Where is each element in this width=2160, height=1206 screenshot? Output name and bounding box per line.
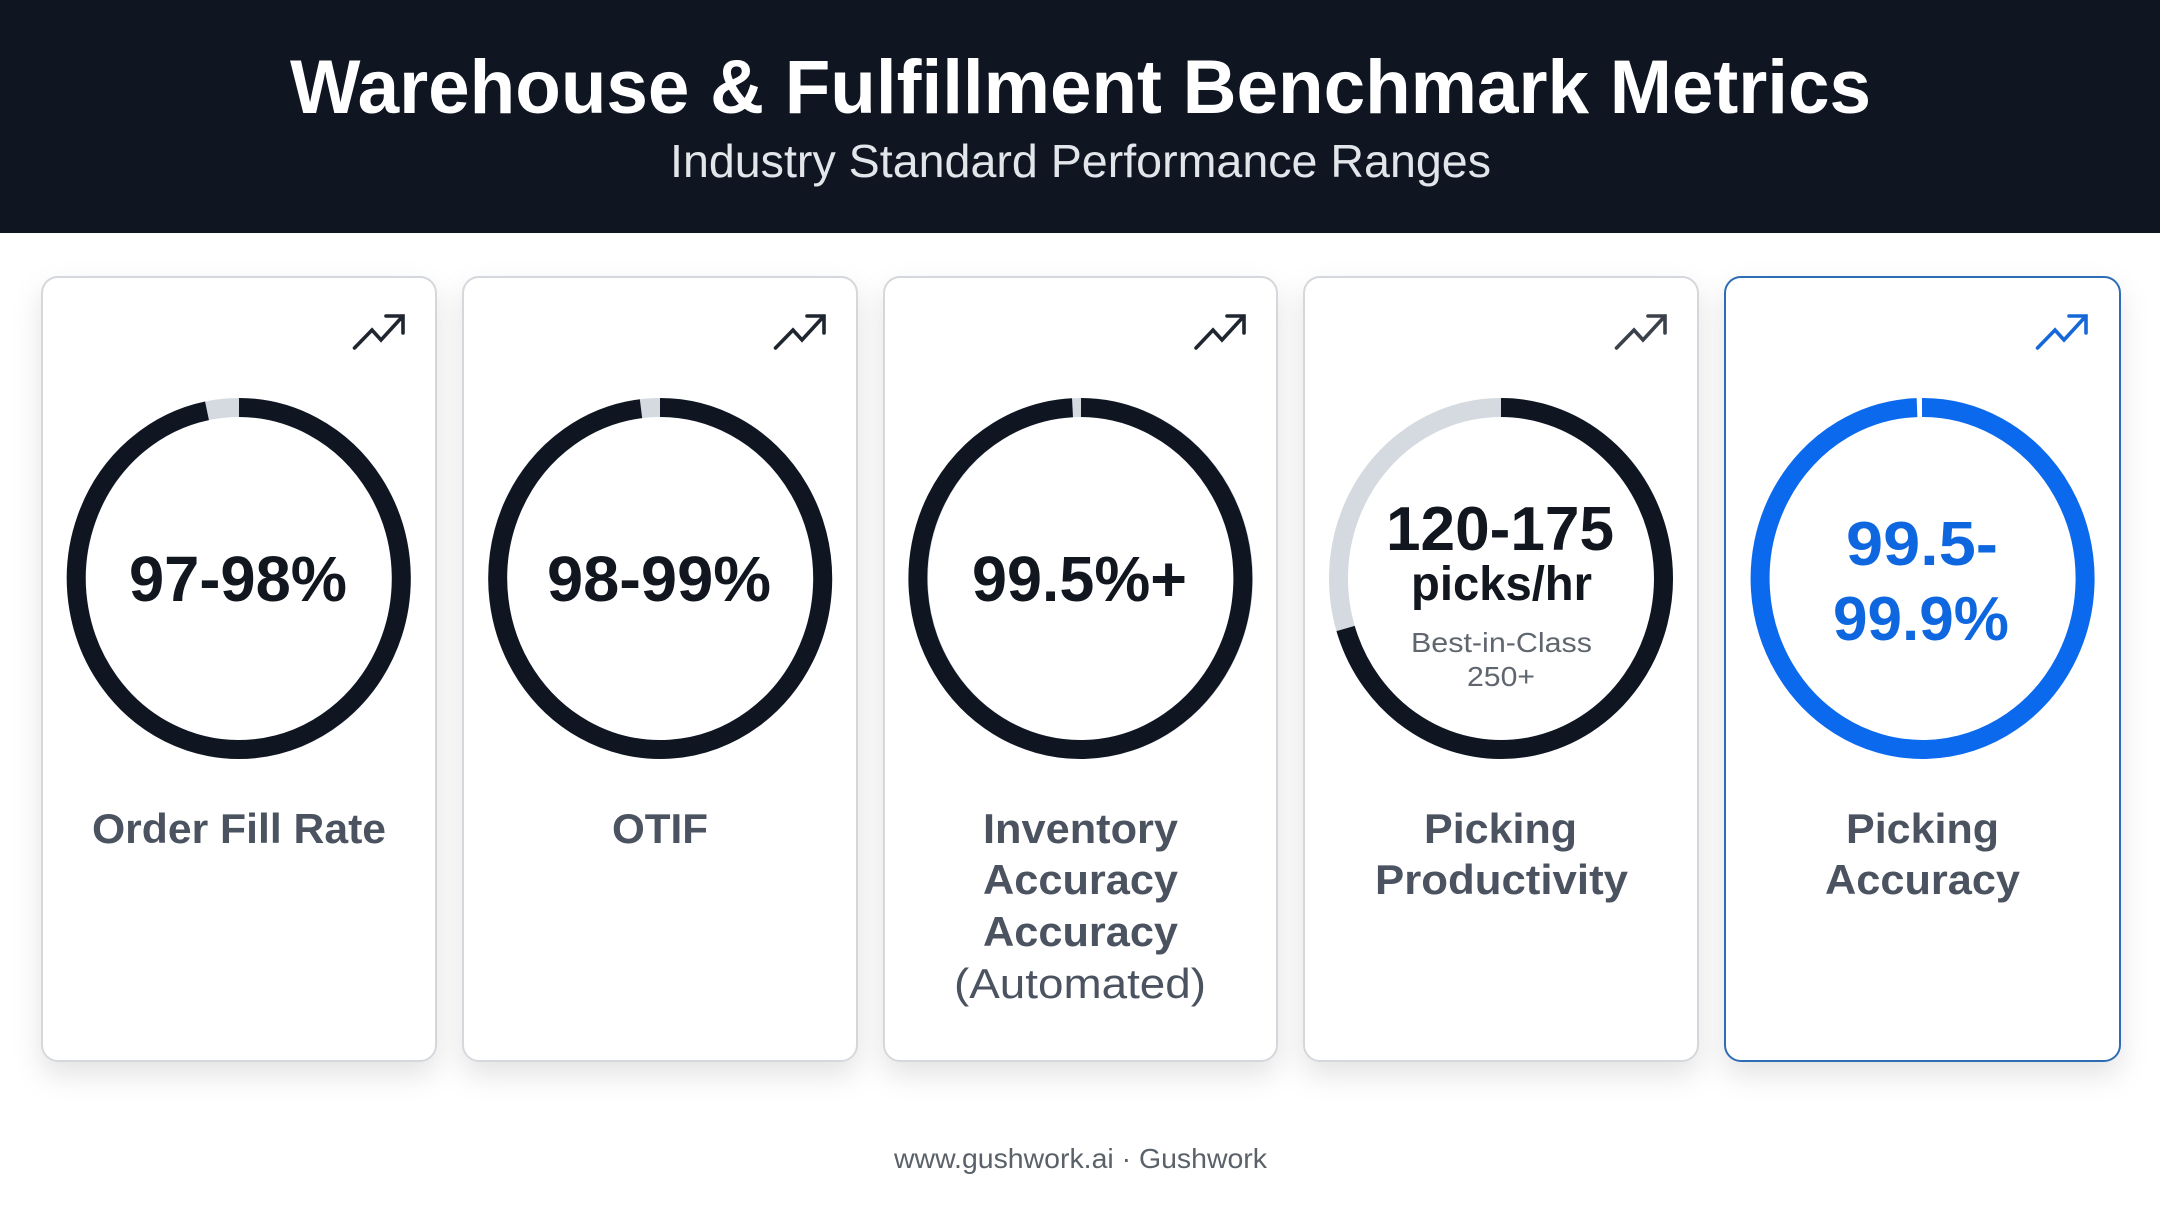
value: 120-175 <box>1386 495 1614 564</box>
subtitle: Industry Standard Performance Ranges <box>670 135 1491 187</box>
gauge: 99.5%+ <box>918 408 1244 750</box>
label: (Automated) <box>954 960 1206 1007</box>
value: picks/hr <box>1411 558 1592 611</box>
header band <box>0 0 2160 233</box>
label <box>954 805 1206 1007</box>
icon: trend arrow <box>2038 316 2086 348</box>
value <box>1833 510 2009 654</box>
icon: trend arrow <box>776 316 824 348</box>
value: 99.5%+ <box>972 543 1187 615</box>
icon: trend arrow <box>354 316 403 348</box>
icon: trend arrow <box>1196 316 1244 348</box>
label: Inventory <box>983 805 1179 852</box>
label: Accuracy <box>983 856 1179 903</box>
label: Order Fill Rate <box>92 805 386 852</box>
gauge: 99.5-99.9% <box>1760 407 2085 749</box>
gauge: 97-98% <box>76 408 402 750</box>
best-in-class note: Best-in-Class <box>1411 627 1592 658</box>
value <box>1386 495 1614 611</box>
label: Accuracy <box>1825 856 2021 903</box>
label: Picking <box>1424 805 1577 852</box>
footer: www.gushwork.ai · Gushwork <box>893 1143 1268 1174</box>
title: Warehouse & Fulfillment Benchmark Metrics <box>290 45 1871 130</box>
best-in-class note: 250+ <box>1467 661 1535 692</box>
gauge: 98-99% <box>498 407 823 750</box>
panel: OTIF <box>463 277 857 1061</box>
label: OTIF <box>612 805 708 852</box>
label: Accuracy <box>983 908 1179 955</box>
label: Picking <box>1846 805 1999 852</box>
label <box>1825 805 2021 903</box>
panel: inventory accuracy <box>884 277 1277 1061</box>
panel: order fill rate <box>42 277 436 1061</box>
panel: picking productivity <box>1304 277 1698 1061</box>
icon: trend arrow <box>1616 316 1665 348</box>
label: Productivity <box>1375 856 1629 903</box>
best-in-class note <box>1411 627 1592 692</box>
value: 99.5- <box>1846 510 1998 579</box>
gauge: 120-175 <box>1338 408 1664 750</box>
value: 98-99% <box>547 543 771 615</box>
label <box>1375 805 1629 903</box>
panel: picking accuracy <box>1725 277 2120 1061</box>
value: 99.9% <box>1833 585 2009 654</box>
value: 97-98% <box>129 543 347 615</box>
